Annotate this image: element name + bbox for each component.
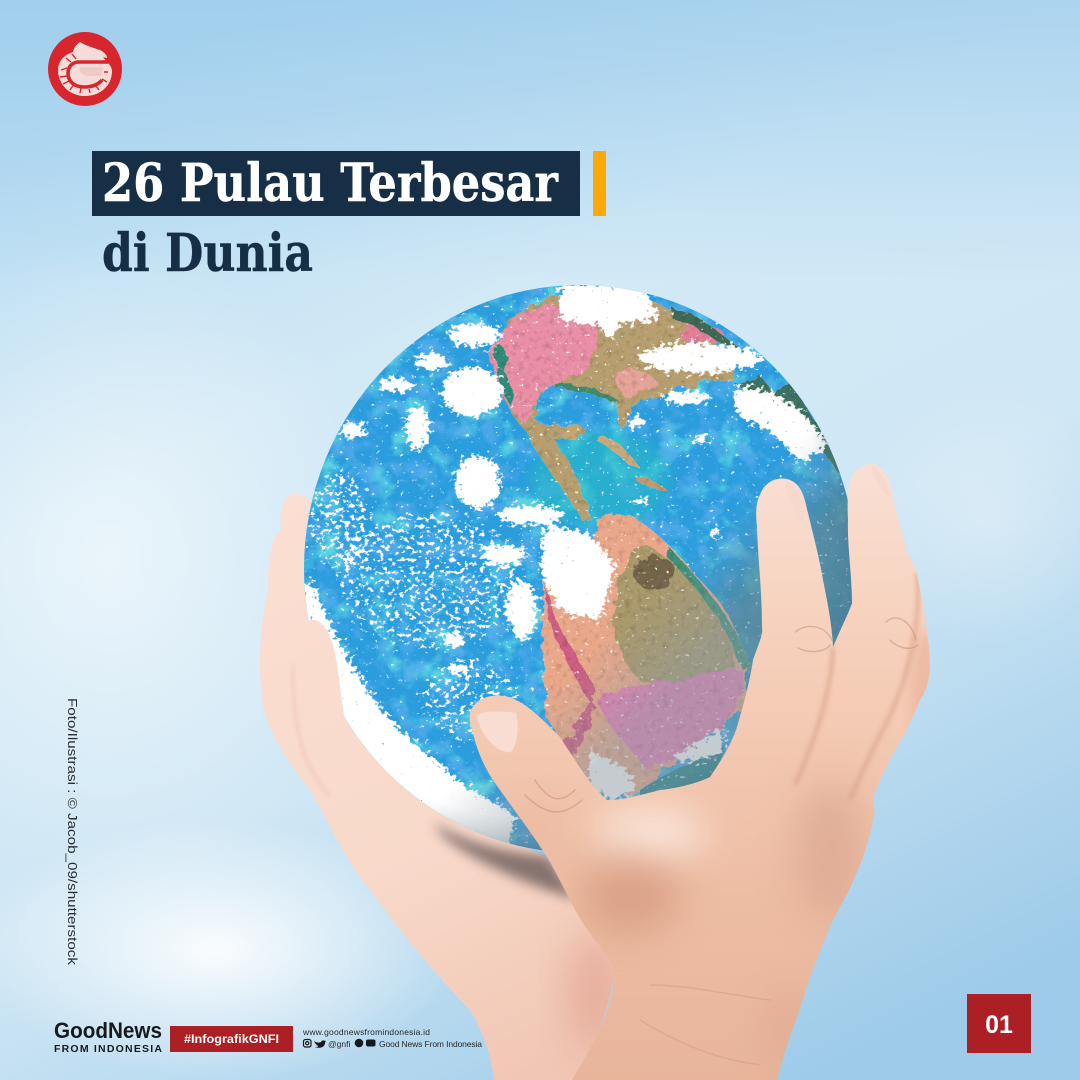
left hand front finger over globe — [293, 620, 470, 900]
northern dark forest — [670, 305, 745, 352]
left hand behind globe — [260, 494, 621, 1080]
Yucatan patch — [560, 425, 583, 438]
globe: deep blue ocean patches — [300, 280, 860, 860]
left hand pink palm shadow — [569, 930, 621, 1050]
finger separation crease — [293, 665, 330, 797]
page number badge: 01 — [985, 1011, 1013, 1039]
icon: middle finger nail — [871, 465, 891, 497]
photo credit: Foto/Ilustrasi : © Jacob_09/shutterstock — [65, 698, 79, 966]
globe: caribbean teal water — [530, 430, 670, 530]
South America salmon base — [542, 514, 747, 797]
website address: www.goodnewsfromindonesia.id — [302, 1027, 430, 1037]
icon: thumb nail — [476, 711, 518, 752]
right hand shading — [522, 572, 930, 1047]
Gulf coast green — [553, 383, 618, 403]
icon: index finger nail — [785, 481, 804, 524]
South America coastal green — [665, 548, 750, 670]
globe cast shadow on palm — [432, 822, 578, 900]
right hand holding globe — [470, 464, 939, 1080]
Hispaniola island — [636, 476, 668, 491]
icon: youtube — [366, 1040, 376, 1046]
globe: teal ocean patches — [300, 280, 860, 860]
Andes southern ridge — [564, 700, 597, 755]
right hand knuckle creases — [525, 618, 918, 1065]
gap shadow between index and middle fingers — [795, 647, 833, 785]
Andes pink ridge — [544, 585, 597, 702]
icon: twitter — [314, 1040, 326, 1048]
globe: white underside shading — [443, 436, 852, 850]
title line two: di Dunia — [102, 223, 313, 284]
globe: sphere edge shading — [430, 426, 852, 850]
social handle: @gnfi — [328, 1039, 350, 1049]
footer brand block: #InfografikGNFI — [184, 1034, 279, 1046]
footer brand block: FROM INDONESIA — [54, 1043, 162, 1055]
title accent bar — [593, 151, 606, 216]
North America pink west — [490, 302, 598, 425]
icon: instagram — [304, 1040, 311, 1047]
icon: GNFI red circular logo — [48, 32, 122, 106]
South America dark highlands — [635, 555, 675, 591]
hashtag badge — [170, 1026, 293, 1052]
gap shadow between middle and ring fingers — [850, 573, 918, 800]
globe: southern dark water — [640, 745, 725, 800]
Pacific coast green — [496, 345, 514, 405]
title band — [92, 151, 580, 216]
globe — [300, 280, 860, 860]
right hand palm and fingers — [470, 464, 930, 1080]
globe: landmasses — [490, 290, 855, 797]
footer brand block — [54, 1018, 482, 1055]
North America pink plains — [615, 368, 660, 398]
North America tan interior — [490, 290, 733, 522]
globe: dark atlantic edge — [708, 469, 852, 715]
South America olive basin — [614, 545, 737, 684]
icon: facebook — [355, 1039, 363, 1047]
page number badge — [967, 994, 1031, 1053]
social name: Good News From Indonesia — [379, 1039, 482, 1049]
globe: cloud cover — [300, 280, 860, 860]
heading: 26 Pulau Terbesar di Dunia — [92, 151, 606, 284]
Cuba island — [596, 434, 638, 466]
title line one: 26 Pulau Terbesar — [102, 153, 559, 214]
South America pink highlands — [597, 669, 745, 768]
North America pink east patch — [680, 326, 724, 344]
brand: GoodNews From Indonesia: GoodNews — [54, 1018, 162, 1043]
